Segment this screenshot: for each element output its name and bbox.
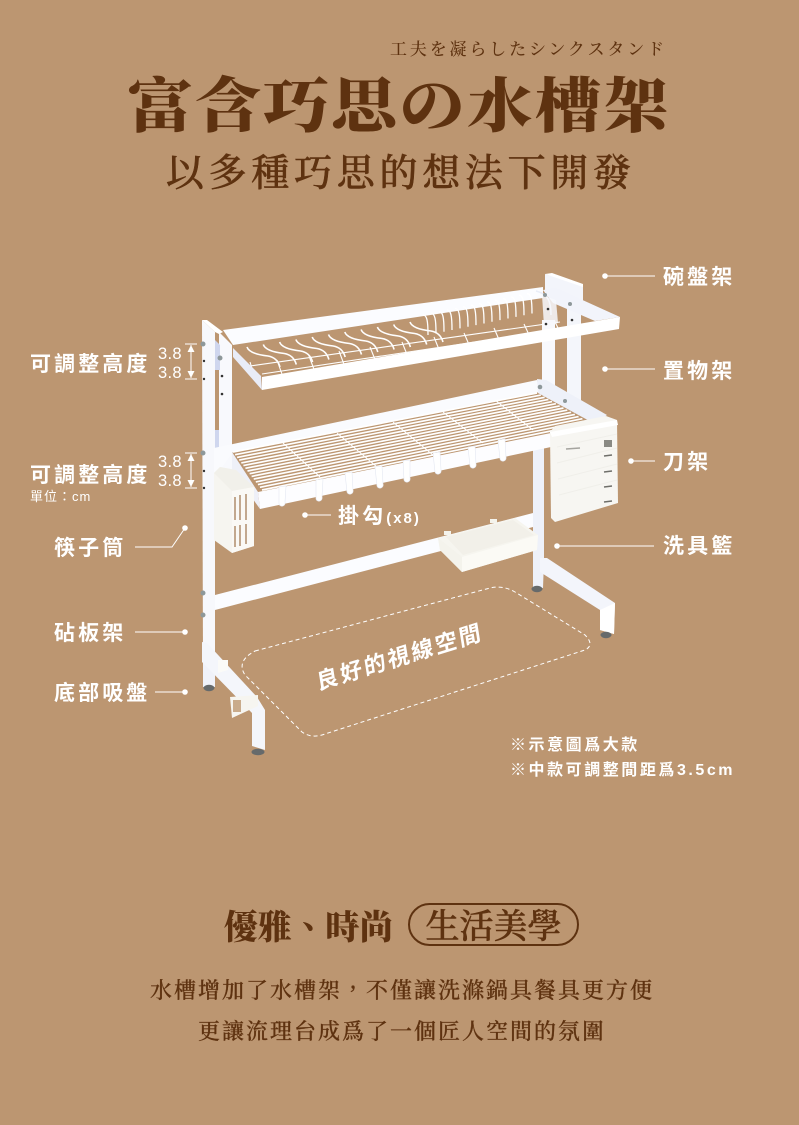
body text line 1: 水槽增加了水槽架，不僅讓洗滌鍋具餐具更方便 [150, 978, 654, 1003]
upper dimension values [158, 345, 182, 382]
title: 富含巧思の水槽架 [127, 75, 671, 140]
hooks (x8) [279, 439, 506, 506]
right foot [532, 558, 615, 638]
label: unit note: 單位：cm [30, 489, 91, 504]
label: chopstick holder: 筷子筒 [54, 537, 126, 560]
footnotes [510, 736, 735, 779]
eyebrow text: 工夫を凝らしたシンクスタンド [390, 40, 667, 59]
footnotes: ※示意圖爲大款 [510, 737, 640, 754]
lower dimension values [158, 453, 182, 490]
label: adjustable height lower: 可調整高度 [30, 464, 150, 487]
lower crossbar [215, 513, 533, 610]
washing tool basket [438, 518, 538, 572]
section heading pill [408, 903, 579, 946]
label: cutting board rack: 砧板架 [54, 622, 126, 645]
section heading pill: 生活美學 [426, 909, 562, 946]
subtitle: 以多種巧思的想法下開發 [166, 153, 636, 195]
label: storage rack: 置物架 [663, 360, 735, 383]
left foot with suction plates [202, 642, 265, 755]
section heading: 優雅、時尚 [224, 910, 393, 947]
label: dish rack: 碗盤架 [663, 266, 735, 289]
label: washing basket: 洗具籃 [663, 535, 735, 558]
top shelf: dish rack [223, 287, 620, 390]
label: adjustable height upper: 可調整高度 [30, 353, 150, 376]
footnotes: ※中款可調整間距爲3.5cm [510, 762, 735, 779]
knife block [550, 416, 618, 522]
rear uprights [533, 273, 583, 588]
label: knife rack: 刀架 [663, 451, 711, 474]
chopstick holder [214, 467, 254, 553]
lower shelf: wire storage rack [214, 379, 607, 509]
label: hooks: 掛勾(x8) [338, 505, 421, 528]
left uprights [200, 320, 232, 663]
lower dimension values: 3.8 [158, 453, 182, 471]
upper dimension values: 3.8 [158, 345, 182, 363]
upper dimension values: 3.8 [158, 364, 182, 382]
body text line 2: 更讓流理台成爲了一個匠人空間的氛圍 [198, 1019, 606, 1044]
label: suction base: 底部吸盤 [54, 682, 150, 705]
floor space label: 良好的視線空間 [315, 619, 485, 695]
lower dimension values: 3.8 [158, 472, 182, 490]
